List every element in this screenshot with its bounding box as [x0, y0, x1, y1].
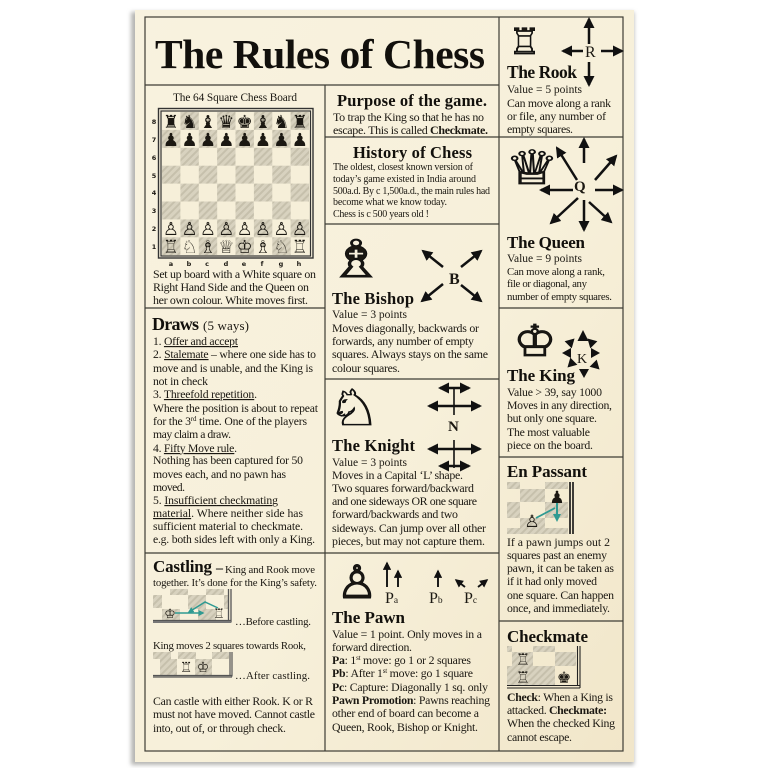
board setup text: Right Hand Side and the Queen on [153, 280, 309, 294]
board pieces: ♙ [163, 219, 179, 240]
diagram: checkmate [507, 646, 580, 688]
panel: draws: 5. Insufficient checkmating [153, 494, 278, 507]
panel: draws: 1. Offer and accept [153, 335, 239, 348]
icon: bishop: ♗ [326, 230, 386, 290]
board pieces: ♘ [273, 237, 290, 258]
panel: draws: material. Where neither side has [153, 507, 303, 520]
panel: king: Value > 39, say 1000 [507, 385, 602, 399]
board pieces: ♙ [255, 219, 271, 240]
board pieces: ♖ [163, 237, 179, 258]
rank labels [152, 118, 157, 251]
panel: draws: Where the position is about to repeat [153, 402, 319, 415]
board pieces: ♟ [255, 130, 271, 151]
board pieces [163, 112, 308, 258]
board caption: The 64 Square Chess Board [173, 92, 297, 104]
panel: bishop: The Bishop [332, 289, 414, 308]
diagram: after castling: ♔ [197, 660, 209, 676]
icon: king: ♔ [513, 315, 557, 366]
board pieces: ♜ [292, 112, 308, 133]
panel: draws [152, 314, 319, 546]
panel: draws: moved. [153, 481, 185, 494]
panel: queen: The Queen [507, 233, 586, 252]
panel: bishop: forwards, any number of empty [332, 334, 474, 348]
panel: knight: sideways. Can jump over all other [332, 521, 486, 535]
panel: queen: number of empty squares. [507, 291, 612, 303]
board pieces: ♞ [273, 112, 290, 133]
board pieces: ♙ [200, 219, 216, 240]
panel: knight: Value = 3 points [332, 457, 408, 469]
panel: draws: 2. Stalemate – where one side has to [153, 348, 316, 361]
panel: draws: moves each, and no pawn has [153, 468, 286, 481]
board pieces: ♙ [292, 219, 308, 240]
panel: draws: 3. Threefold repetition. [153, 388, 257, 401]
panel: en passant: pawn, it can be taken as [507, 561, 614, 575]
icon: queen: ♕ [505, 140, 559, 195]
panel: castling: …Before castling. [235, 616, 311, 628]
diagram: before castling [153, 589, 231, 622]
panel: draws: move and is unable, and the King is [153, 362, 313, 375]
panel: draws: Nothing has been captured for 50 [153, 454, 303, 467]
diagram: after castling: ♖ [180, 660, 192, 676]
panel: pawn [332, 555, 490, 734]
panel: queen: Can move along a rank, [507, 266, 605, 278]
rank labels: 4 [152, 189, 157, 197]
diagram: checkmate: ♖ [516, 650, 530, 669]
panel: bishop: colour squares. [332, 361, 400, 375]
panel: pawn: The Pawn [332, 608, 406, 627]
board setup text: her own colour. White moves first. [153, 293, 308, 307]
panel: en passant: once, and immediately. [507, 601, 610, 615]
board pieces: ♙ [273, 219, 290, 240]
board pieces: ♟ [200, 130, 216, 151]
panel: chess board [152, 92, 316, 307]
panel: pawn: Pc: Capture: Diagonally 1 sq. only [332, 680, 488, 694]
rank labels: 5 [152, 172, 157, 180]
panel: pawn: move: go 1 square [387, 666, 473, 680]
icon: knight: ♘ [327, 380, 381, 438]
diagram: before castling: ♖ [213, 607, 225, 622]
panel: knight: and one sideways OR one square [332, 494, 477, 508]
board pieces: ♛ [218, 112, 234, 133]
pawn move arrows: Pa [385, 590, 399, 607]
panel: rook: or file, any number of [507, 109, 606, 123]
board frame and squares [158, 108, 313, 258]
board pieces: ♙ [182, 219, 198, 240]
panel: history: become what we know today. [333, 197, 447, 208]
queen move arrows [541, 139, 622, 230]
panel: checkmate: When the checked King [507, 716, 615, 730]
file labels [169, 260, 302, 268]
panel: pawn: Pb: After 1 [332, 666, 383, 680]
panel: draws: for the 3 [153, 415, 191, 428]
panel: bishop: Moves diagonally, backwards or [332, 321, 479, 335]
panel: rook: Can move along a rank [507, 96, 611, 110]
file labels: g [279, 260, 284, 268]
board pieces: ♝ [255, 112, 271, 133]
diagram: en passant: ♙ [524, 512, 540, 532]
panel: knight [327, 380, 486, 548]
panel: purpose [333, 91, 488, 137]
panel: rook: empty squares. [507, 122, 573, 136]
panel: castling: King and Rook move [225, 564, 315, 576]
file labels: h [297, 260, 302, 268]
board pieces: ♜ [163, 112, 179, 133]
table grid frame [145, 17, 623, 751]
panel: checkmate: Check: When a King is [507, 690, 613, 704]
panel: checkmate: attacked. Checkmate: [507, 703, 607, 717]
panel: history: The oldest, closest known version of [333, 162, 474, 173]
panel: king: The King [507, 366, 576, 385]
panel: purpose: Purpose of the game. [337, 91, 487, 110]
panel: pawn: st [383, 667, 387, 675]
panel: draws: Draws [152, 314, 199, 334]
panel: en passant: if it had only moved [507, 574, 597, 588]
panel: history: Chess is c 500 years old ! [333, 209, 429, 220]
panel: castling: …After castling. [235, 670, 310, 682]
board pieces: ♟ [292, 130, 308, 151]
title: The Rules of Chess [155, 31, 485, 77]
panel: pawn: move: go 1 or 2 squares [360, 653, 471, 667]
knight move arrows [429, 388, 480, 468]
paper background [131, 10, 634, 765]
rook move arrows: R [585, 44, 596, 61]
panel: queen: file or diagonal, any [507, 278, 588, 290]
panel: bishop: squares. Always stays on the same [332, 347, 488, 361]
panel: pawn: Pa: 1 [332, 653, 356, 667]
panel: king: piece on the board. [507, 438, 593, 452]
panel: pawn: Queen, Rook, Bishop or Knight. [332, 720, 478, 734]
panel: en passant: En Passant [507, 462, 587, 481]
panel: rook: Value = 5 points [507, 84, 583, 96]
board pieces: ♞ [182, 112, 198, 133]
panel: castling: King moves 2 squares towards Rook, [153, 640, 306, 652]
panel: castling [153, 557, 317, 735]
pawn move arrows [385, 563, 487, 607]
panel: castling: into, out of, or through check. [153, 721, 286, 735]
board pieces: ♚ [237, 112, 253, 133]
diagram: en passant: ♟ [549, 488, 565, 508]
panel: en passant [507, 462, 614, 615]
panel: en passant: one square. Can happen [507, 588, 614, 602]
panel: history: today’s game existed in India around [333, 174, 476, 185]
rank labels: 8 [152, 118, 157, 126]
file labels: e [242, 260, 247, 268]
pawn move arrows: Pb [429, 590, 443, 607]
panel: draws: rd [191, 415, 197, 423]
panel: history: History of Chess [353, 143, 473, 162]
panel: castling: Castling [153, 557, 212, 576]
rank labels: 3 [152, 207, 156, 215]
panel: king: but only one square. [507, 411, 597, 425]
rank labels: 2 [152, 225, 156, 233]
board pieces: ♝ [200, 112, 216, 133]
queen move arrows: Q [574, 179, 586, 195]
panel: bishop [326, 230, 488, 375]
panel: checkmate [507, 627, 615, 744]
panel: history [333, 143, 490, 220]
panel: pawn: st [356, 654, 361, 662]
panel: draws: 4. Fifty Move rule. [153, 442, 237, 455]
panel: king: Moves in any direction, [507, 398, 612, 412]
bishop move arrows [422, 251, 481, 301]
file labels: d [224, 260, 229, 268]
file labels: b [187, 260, 192, 268]
rank labels: 1 [152, 243, 157, 251]
diagram: checkmate: ♚ [557, 668, 571, 687]
panel: king [507, 315, 612, 452]
board setup text [153, 267, 316, 307]
panel: draws: not in check [153, 375, 208, 388]
bishop move arrows: B [449, 271, 460, 288]
panel: pawn: Pawn Promotion: Pawns reaching [332, 693, 490, 707]
panel: castling: – [215, 561, 224, 576]
panel: history: 500a.d. By c 1,500a.d., the main rules had [333, 186, 490, 197]
pawn move arrows: Pc [464, 590, 477, 607]
panel: rook: The Rook [507, 62, 577, 82]
board pieces: ♘ [182, 237, 198, 258]
diagram: checkmate: ♖ [516, 668, 530, 687]
file labels: a [169, 260, 173, 268]
panel: draws: (5 ways) [203, 318, 249, 333]
panel: knight: Two squares forward/backward [332, 481, 474, 495]
panel: queen: Value = 9 points [507, 253, 583, 265]
board pieces: ♙ [218, 219, 234, 240]
panel: castling: together. It’s done for the King’s safety. [153, 577, 317, 589]
board pieces: ♔ [237, 237, 253, 258]
icon: pawn: ♙ [336, 555, 378, 609]
board pieces: ♗ [200, 237, 216, 258]
board pieces: ♟ [182, 130, 198, 151]
board pieces: ♕ [218, 237, 234, 258]
file labels: c [205, 260, 209, 268]
panel: knight: The Knight [332, 436, 416, 455]
panel: purpose: escape. This is called Checkmate. [333, 123, 488, 137]
panel: pawn: Value = 1 point. Only moves in a [332, 627, 483, 641]
panel: pawn: other end of board can become a [332, 706, 480, 720]
board pieces: ♙ [237, 219, 253, 240]
panel: king: The most valuable [507, 425, 590, 439]
panel: rook [507, 19, 622, 136]
panel: knight: forward/backwards and two [332, 507, 458, 521]
board pieces: ♟ [163, 130, 179, 151]
king move arrows: K [577, 352, 587, 367]
board setup text: Set up board with a White square on [153, 267, 316, 281]
board pieces: ♟ [218, 130, 234, 151]
panel: knight: pieces, but may not capture them. [332, 534, 485, 548]
panel: queen [505, 139, 622, 303]
panel: draws: may claim a draw. [153, 428, 231, 441]
rank labels: 7 [152, 136, 156, 144]
board pieces: ♟ [237, 130, 253, 151]
board pieces: ♖ [292, 237, 308, 258]
diagram: after castling [153, 652, 232, 677]
panel: en passant: If a pawn jumps out 2 [507, 535, 610, 549]
panel: knight: Moves in a Capital ‘L’ shape. [332, 468, 463, 482]
board pieces: ♗ [255, 237, 271, 258]
panel: draws: time. One of the players [196, 415, 307, 428]
rank labels: 6 [152, 154, 157, 162]
panel: castling: must not have moved. Cannot castle [153, 707, 315, 721]
diagram: before castling: ♔ [164, 607, 176, 622]
panel: pawn: forward direction. [332, 640, 412, 654]
panel: draws: e.g. both sides left with only a King. [153, 533, 315, 546]
panel: en passant: squares past an enemy [507, 548, 607, 562]
panel: draws: sufficient material to checkmate. [153, 520, 303, 533]
panel: castling: Can castle with either Rook. K or R [153, 694, 313, 708]
file labels: f [261, 260, 264, 268]
panel: purpose: To trap the King so that he has no [333, 110, 484, 124]
panel: checkmate: cannot escape. [507, 730, 572, 744]
panel: checkmate: Checkmate [507, 627, 588, 646]
knight move arrows: N [448, 419, 459, 435]
panel: bishop: Value = 3 points [332, 309, 408, 321]
icon: rook: ♖ [508, 22, 541, 63]
diagram: en passant [507, 482, 573, 534]
board pieces: ♟ [273, 130, 290, 151]
